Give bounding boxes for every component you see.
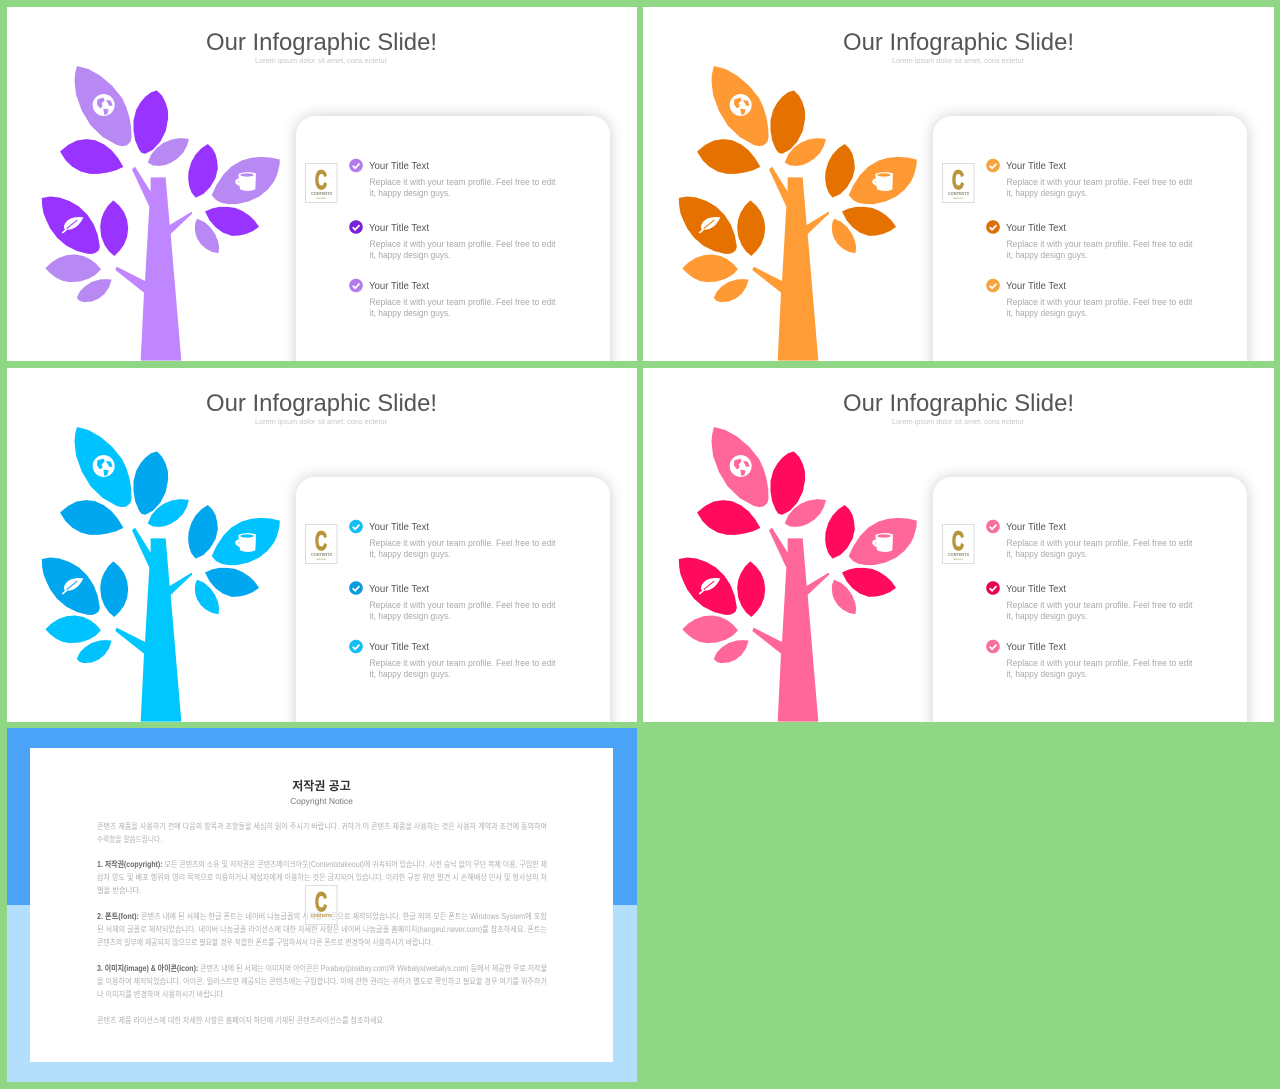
list item 2: [349, 581, 556, 621]
section: font: 콘텐츠의 일부에 제공되지 않으므로 필요할 경우 적합한 폰트를 구입하셔서 다른 폰트로 변경하여 사용하시기 바랍니다.: [97, 937, 433, 947]
list item 2: [986, 581, 1193, 621]
list item 1: it, happy design guys.: [370, 188, 450, 198]
logo: real.com: [953, 558, 963, 561]
list item 3: it, happy design guys.: [1006, 669, 1088, 679]
list item 1: [349, 520, 556, 559]
title: Our Infographic Slide!: [843, 390, 1074, 417]
list item 2: [986, 220, 1193, 260]
list item 1: it, happy design guys.: [1006, 188, 1088, 198]
intro paragraph: 콘텐츠 제품을 사용하기 전에 다음의 항목과 조항들을 세심히 읽어 주시기 바랍니다. 귀하가 이 콘텐츠 제품을 사용하는 것은 사용자 계약과 조건에 동의하여: [97, 821, 547, 831]
logo: [306, 524, 337, 564]
list item 2: Your Title Text: [369, 223, 429, 234]
list item 1: it, happy design guys.: [1006, 549, 1088, 559]
list item 1: [986, 159, 1193, 198]
logo: [942, 164, 974, 202]
icon: leaf: [699, 578, 720, 594]
logo: real.com: [316, 558, 326, 561]
closing note: 콘텐츠 제품 라이선스에 대한 자세한 사항은 홈페이지 하단에 기재된 콘텐츠라이선스를 참조하세요.: [97, 1015, 385, 1025]
list item 2: it, happy design guys.: [370, 250, 450, 260]
icon: globe: [730, 455, 752, 477]
section: font: 된 서체의 글꼴로 제작되었습니다. 네이버 나눔글꼴 라이선스에 대한 자세한 사항은 네이버 나눔글꼴 홈페이지(hangeul.naver.com)를 참조하세요. 폰트는: [97, 924, 547, 934]
title: Our Infographic Slide!: [206, 29, 437, 56]
intro paragraph: 수락함을 말씀드립니다.: [97, 834, 162, 844]
tree: [679, 67, 916, 361]
logo: C: [952, 526, 964, 556]
logo: CONTENTS: [948, 191, 969, 196]
list item 1: Replace it with your team profile. Feel free to edit: [1006, 177, 1193, 187]
title: Our Infographic Slide!: [206, 390, 437, 417]
panel: pink slide: [643, 368, 1274, 722]
title: Our Infographic Slide!: [843, 29, 1074, 56]
section: copyright: 삼자 양도 및 배포 행위와 영리 목적으로 이용하거나 제삼자에게 이용하는 것은 금지되어 있습니다. 이러한 규정 위반 발견 시 손해배상 민사 및 형사상의 처: [97, 872, 547, 882]
icon: mug: [235, 172, 256, 191]
section: image and icon: 3. 이미지(image) & 아이콘(icon): 콘텐츠 내에 된 서체는 이미지와 아이콘은 Pixabay(pixabay.com)와 Webalys(webalys.com) 등에서 제공한 무료 저작물: [97, 963, 547, 973]
section: image and icon: [97, 963, 547, 999]
list item 2: Replace it with your team profile. Feel free to edit: [370, 239, 556, 249]
list item 1: Your Title Text: [1006, 161, 1066, 172]
logo: real.com: [316, 197, 326, 200]
logo: C: [315, 887, 327, 917]
list item 3: [986, 279, 1193, 318]
list item 3: Your Title Text: [369, 281, 429, 292]
logo: CONTENTS: [948, 552, 969, 557]
list item 3: Replace it with your team profile. Feel free to edit: [1006, 658, 1193, 668]
section: image and icon: 을 이용하여 제작되었습니다. 아이콘, 일러스트만 제공되는 콘텐츠에는 구입합니다. 이에 관한 권리는 귀하가 별도로 확인하고 필요할 경우 여기를 위주하거: [97, 976, 547, 986]
panel: blue slide: [7, 368, 637, 722]
section: image and icon: 나 이미지를 변경하여 사용하시기 바랍니다.: [97, 989, 225, 999]
logo: real.com: [953, 197, 963, 200]
panel: purple slide: [7, 7, 637, 361]
list item 3: [986, 640, 1193, 679]
list item 2: Replace it with your team profile. Feel free to edit: [370, 600, 556, 610]
subtitle: Lorem ipsum dolor sit amet, cons ectetur: [892, 58, 1025, 65]
panel: orange slide: [643, 7, 1274, 361]
logo: CONTENTS: [311, 552, 332, 557]
tree: [679, 428, 916, 722]
list item 3: Replace it with your team profile. Feel free to edit: [370, 297, 556, 307]
subtitle: Lorem ipsum dolor sit amet, cons ectetur: [255, 58, 388, 65]
list item 3: [349, 640, 556, 679]
card: [296, 477, 610, 767]
section: font: 2. 폰트(font): 콘텐츠 내에 된 서체는 한글 폰트는 네이버 나눔글꼴의 서체를 기준으로 제작되었습니다. 한글 외의 모든 폰트는 Windows System에 포함: [97, 911, 548, 921]
list item 1: Replace it with your team profile. Feel free to edit: [370, 177, 556, 187]
logo: [306, 164, 337, 202]
subtitle: Lorem ipsum dolor sit amet, cons ectetur: [255, 419, 388, 426]
list item 2: Replace it with your team profile. Feel free to edit: [1006, 239, 1193, 249]
list item 2: Your Title Text: [369, 584, 429, 595]
list item 2: it, happy design guys.: [1006, 611, 1088, 621]
list item 3: Your Title Text: [1006, 281, 1066, 292]
list item 3: Your Title Text: [369, 642, 429, 653]
logo: CONTENTS: [311, 913, 332, 918]
list item 1: it, happy design guys.: [370, 549, 450, 559]
list item 1: Your Title Text: [369, 161, 429, 172]
section: copyright: [97, 859, 547, 895]
list item 3: [349, 279, 556, 318]
list item 1: [349, 159, 556, 198]
heading: 저작권 공고: [292, 778, 351, 793]
section: font: [97, 911, 548, 947]
card: [296, 116, 610, 406]
section: copyright: 1. 저작권(copyright): 모든 콘텐츠의 소유 및 저작권은 콘텐츠메이크아웃(Contentstakeout)에 귀속되어 있습니다. 사전 승낙 없이 무단 복제 이용, 구입한 제: [97, 859, 547, 869]
list item 3: Replace it with your team profile. Feel free to edit: [370, 658, 556, 668]
list item 3: Replace it with your team profile. Feel free to edit: [1006, 297, 1193, 307]
logo: CONTENTS: [311, 191, 332, 196]
icon: mug: [872, 533, 893, 552]
logo: [942, 524, 974, 564]
list item 2: [349, 220, 556, 260]
list item 3: it, happy design guys.: [370, 669, 450, 679]
icon: leaf: [699, 217, 720, 233]
list item 3: it, happy design guys.: [1006, 308, 1088, 318]
list item 1: [986, 520, 1193, 559]
panel: copyright notice: [7, 728, 637, 1082]
list item 3: Your Title Text: [1006, 642, 1066, 653]
logo: C: [315, 165, 327, 195]
icon: leaf: [62, 217, 83, 233]
section: copyright: 벌을 받습니다.: [97, 885, 141, 895]
intro paragraph: [97, 821, 547, 844]
icon: globe: [93, 94, 115, 116]
list item 3: it, happy design guys.: [370, 308, 450, 318]
list item 2: it, happy design guys.: [370, 611, 450, 621]
card: [933, 477, 1247, 767]
icon: leaf: [62, 578, 83, 594]
logo: C: [952, 165, 964, 195]
list item 1: Replace it with your team profile. Feel free to edit: [370, 538, 556, 548]
card: [933, 116, 1247, 406]
tree: [42, 67, 279, 361]
icon: globe: [730, 94, 752, 116]
subheading: Copyright Notice: [290, 796, 353, 806]
logo: [306, 886, 337, 924]
list item 2: it, happy design guys.: [1006, 250, 1088, 260]
list item 1: Your Title Text: [369, 522, 429, 533]
icon: globe: [93, 455, 115, 477]
tree: [42, 428, 279, 722]
logo: C: [315, 526, 327, 556]
icon: mug: [872, 172, 893, 191]
icon: mug: [235, 533, 256, 552]
list item 2: Your Title Text: [1006, 223, 1066, 234]
list item 1: Replace it with your team profile. Feel free to edit: [1006, 538, 1193, 548]
list item 1: Your Title Text: [1006, 522, 1066, 533]
subtitle: Lorem ipsum dolor sit amet, cons ectetur: [892, 419, 1025, 426]
list item 2: Your Title Text: [1006, 584, 1066, 595]
list item 2: Replace it with your team profile. Feel free to edit: [1006, 600, 1193, 610]
